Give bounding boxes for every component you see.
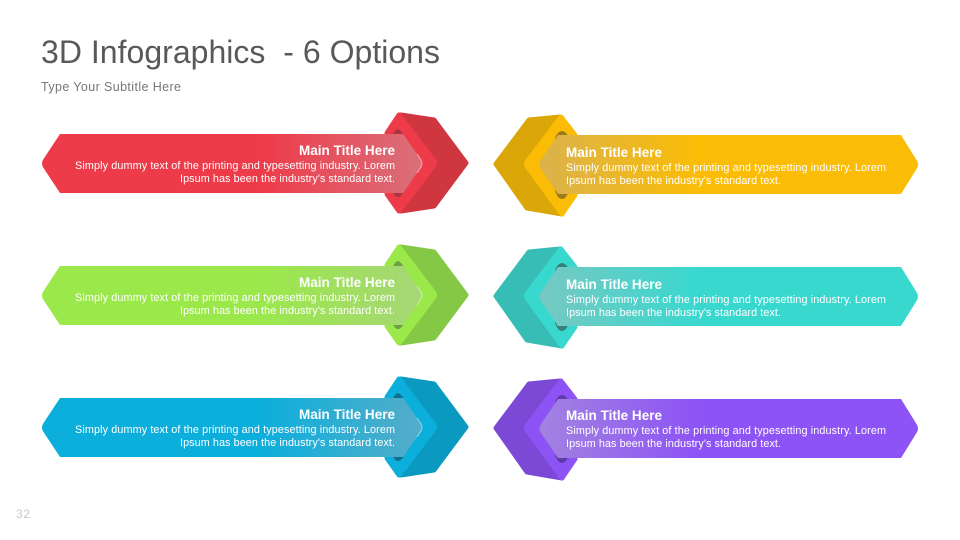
text block: green: Main Title Here (299, 275, 395, 290)
subtitle: Type Your Subtitle Here (41, 80, 181, 94)
highlight: green (417, 286, 422, 305)
panel: yellow arrow option (496, 117, 918, 214)
text block: yellow: Simply dummy text of the printing and typesetting industry. Lorem (566, 162, 886, 174)
arrow bar: green (42, 266, 422, 325)
text block: teal: Ipsum has been the industry's standard text. (566, 307, 781, 319)
text block: blue: Ipsum has been the industry's standard text. (180, 437, 395, 449)
text block: purple (566, 408, 886, 450)
panel: teal arrow option (496, 249, 918, 346)
text block: purple: Ipsum has been the industry's standard text. (566, 438, 781, 450)
text block: red (75, 143, 395, 185)
text block: red: Main Title Here (299, 143, 395, 158)
arrow bar: yellow (540, 135, 918, 194)
3D arrowhead: purple (496, 381, 575, 478)
3D arrowhead: yellow (496, 117, 575, 214)
text block: yellow: Main Title Here (566, 145, 662, 160)
3D arrowhead: teal (496, 249, 575, 346)
text block: purple: Simply dummy text of the printing and typesetting industry. Lorem (566, 425, 886, 437)
panel: blue arrow option (42, 379, 466, 475)
text block: red: Ipsum has been the industry's standard text. (180, 173, 395, 185)
arrow bar: blue (42, 398, 422, 457)
text block: green (75, 275, 395, 317)
text block: yellow: Ipsum has been the industry's standard text. (566, 175, 781, 187)
3D arrowhead: blue (387, 379, 466, 475)
3D arrowhead: red (387, 115, 466, 211)
panel: purple arrow option (496, 381, 918, 478)
text block: green: Ipsum has been the industry's standard text. (180, 305, 395, 317)
arrow bar: teal (540, 267, 918, 326)
page number: 32 (16, 507, 30, 521)
text block: teal: Main Title Here (566, 277, 662, 292)
text block: yellow (566, 145, 886, 187)
3D arrowhead: green (387, 247, 466, 343)
highlight: red (417, 154, 422, 173)
text block: blue (75, 407, 395, 449)
arrow bar: purple (540, 399, 918, 458)
text block: green: Simply dummy text of the printing and typesetting industry. Lorem (75, 292, 395, 304)
text block: blue: Main Title Here (299, 407, 395, 422)
text block: teal: Simply dummy text of the printing and typesetting industry. Lorem (566, 294, 886, 306)
panel: red arrow option (42, 115, 466, 211)
title: 3D Infographics - 6 Options (41, 34, 440, 70)
highlight: blue (417, 418, 422, 437)
arrow bar: red (42, 134, 422, 193)
text block: teal (566, 277, 886, 319)
text block: red: Simply dummy text of the printing and typesetting industry. Lorem (75, 160, 395, 172)
text block: blue: Simply dummy text of the printing and typesetting industry. Lorem (75, 424, 395, 436)
text block: purple: Main Title Here (566, 408, 662, 423)
panel: green arrow option (42, 247, 466, 343)
